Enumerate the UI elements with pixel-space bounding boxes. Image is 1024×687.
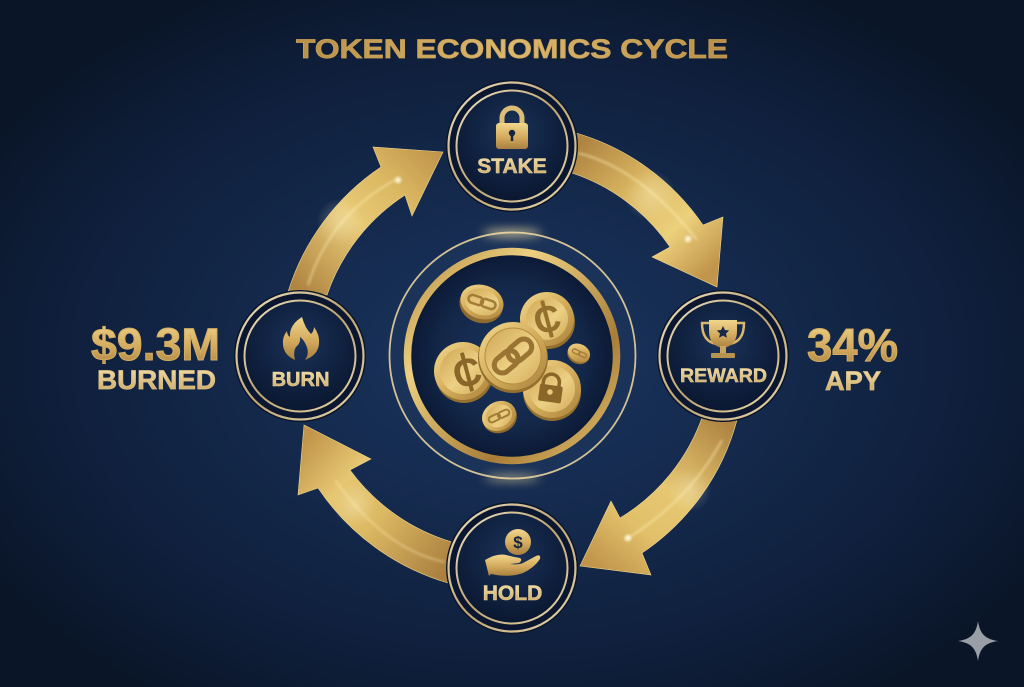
arrow: reward to hold — [580, 415, 737, 575]
arrow: burn to stake — [288, 147, 443, 295]
node: burn — [234, 290, 366, 422]
center hub with coins — [390, 230, 636, 481]
icon: trophy — [702, 320, 744, 358]
coin: top-right C — [520, 292, 575, 349]
stat: apy: APY — [825, 366, 881, 396]
icon: padlock — [496, 108, 528, 149]
label: stake: STAKE — [477, 155, 547, 178]
icon: sparkle watermark — [958, 621, 998, 661]
icon: flame — [283, 317, 319, 360]
label: hold: HOLD — [483, 582, 542, 605]
stat: apy: 34% — [807, 319, 898, 371]
stat: apy — [807, 319, 898, 396]
stat: burned: BURNED — [97, 365, 216, 395]
title: TOKEN ECONOMICS CYCLE — [296, 34, 728, 64]
coin: tiny link — [564, 340, 593, 368]
coin: left C: C — [448, 349, 487, 398]
coin: bottom link — [477, 395, 522, 439]
icon: hand holding coin: $ — [513, 533, 523, 552]
coin: lock — [523, 360, 581, 421]
coin: left C — [434, 342, 493, 403]
label: reward: REWARD — [680, 365, 767, 387]
label: burn: BURN — [272, 369, 329, 391]
coin: top-right C: C — [529, 296, 565, 343]
coin: top-left link — [455, 279, 508, 329]
arrow: stake to reward — [572, 133, 723, 287]
stat: burned — [91, 319, 220, 395]
node: hold — [446, 502, 578, 634]
coin: main link — [478, 322, 548, 393]
node: stake — [446, 80, 578, 212]
arrow: hold to burn — [298, 425, 452, 583]
stat: burned: $9.3M — [91, 319, 220, 370]
node: reward — [657, 290, 789, 422]
